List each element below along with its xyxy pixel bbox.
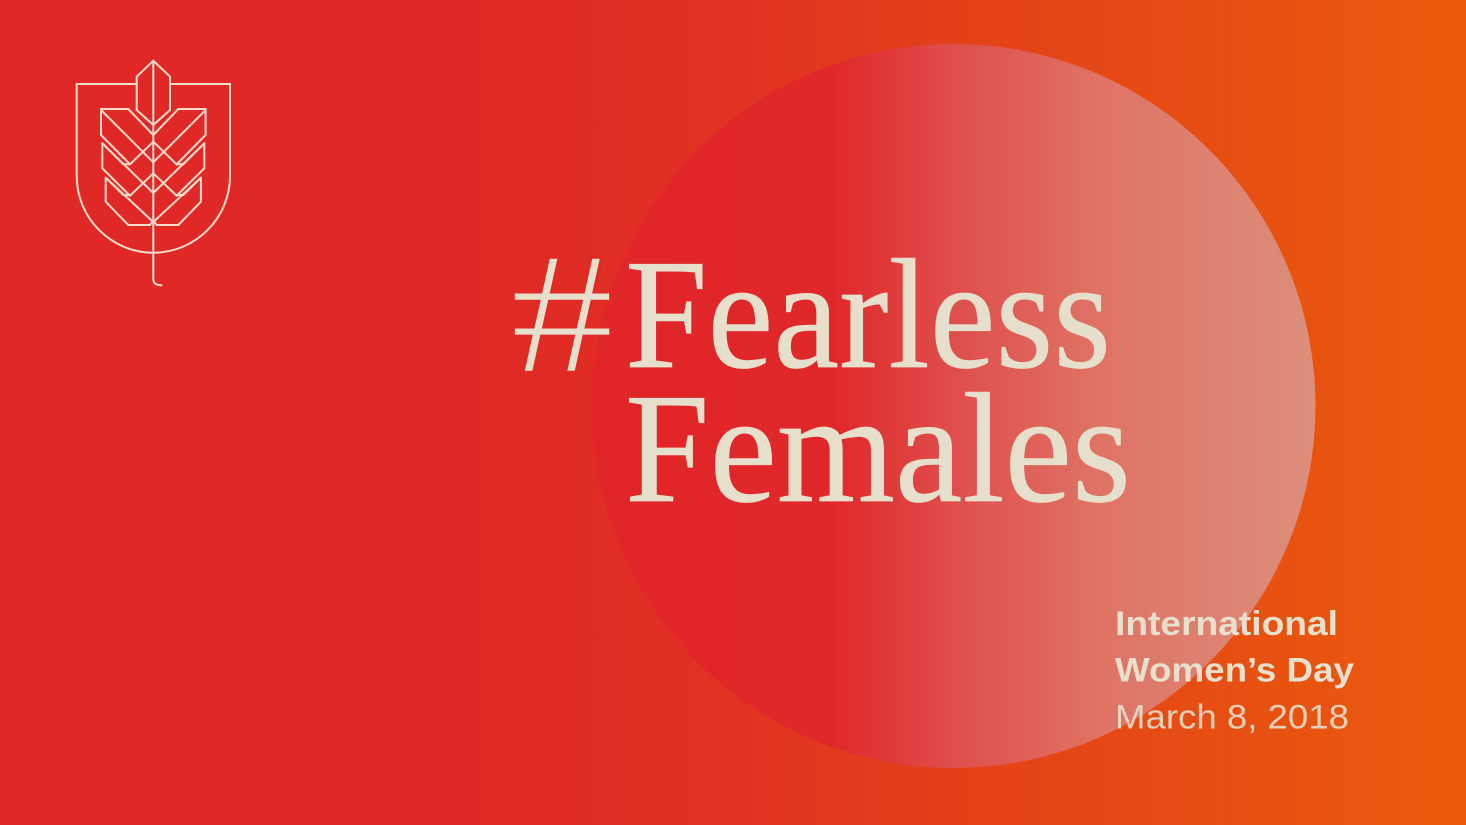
event name and date: Women’s Day <box>1115 652 1354 690</box>
event name and date <box>1115 605 1354 736</box>
title: #Fearless Females: Fearless <box>625 227 1111 401</box>
icon: wheat shield logo <box>77 61 230 285</box>
event name and date: March 8, 2018 <box>1115 698 1349 736</box>
large circle <box>592 44 1316 768</box>
title: #Fearless Females: # <box>510 216 614 410</box>
title: #Fearless Females <box>510 216 1131 535</box>
event name and date: International <box>1115 605 1338 643</box>
title: #Fearless Females: Females <box>625 361 1131 535</box>
